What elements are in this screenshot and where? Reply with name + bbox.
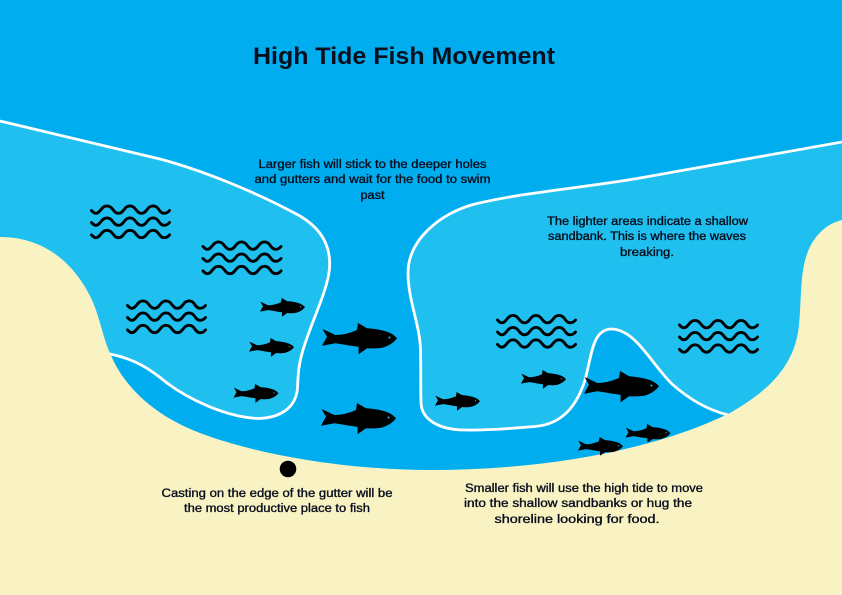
icon: large fish 3 [584,371,659,402]
icon: waves 3 [128,301,206,333]
text: casting note: Casting on the edge of the gutter will be [162,488,392,500]
sand shoreline [0,220,842,595]
title: High Tide Fish Movement [253,43,555,70]
icon: small fish 2 [249,338,294,357]
text: casting note: the most productive place to fish [184,503,370,515]
text: shallow sandbank note: sandbank. This is where the waves [548,231,746,243]
text: smaller fish note [464,483,703,526]
right shallow sandbank [408,142,842,430]
text: larger fish note: Larger fish will stick to the deeper holes [258,159,487,171]
text: smaller fish note: Smaller fish will use the high tide to move [465,483,703,495]
text: shallow sandbank note: breaking. [620,247,674,259]
icon: small fish 4 [435,392,480,411]
text: shallow sandbank note [547,216,749,259]
icon: small fish 6 [578,437,623,456]
text: casting note [162,488,392,515]
icon: waves 1 [92,206,170,238]
text: shallow sandbank note: The lighter areas indicate a shallow [547,216,749,228]
icon: waves 5 [680,320,758,352]
icon: small fish 7 [626,424,670,443]
icon: large fish 2 [321,403,396,434]
icon: casting spot marker [280,461,296,477]
text: larger fish note: past [360,190,385,202]
icon: small fish 5 [521,370,566,389]
icon: small fish 3 [234,384,278,403]
icon: large fish 1 [322,323,397,354]
text: smaller fish note: into the shallow sandbanks or hug the [464,498,692,510]
left shallow sandbank [0,121,330,418]
text: smaller fish note: shoreline looking for food. [494,514,660,526]
icon: waves 4 [498,315,576,347]
text: larger fish note [254,159,490,202]
icon: small fish 1 [260,298,305,317]
text: larger fish note: and gutters and wait for the food to swim [254,174,490,186]
icon: waves 2 [203,242,281,274]
